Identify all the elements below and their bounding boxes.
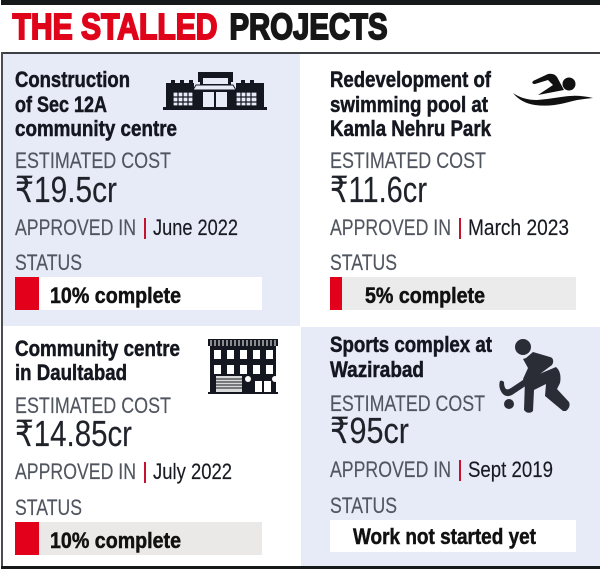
cost value: ₹11.6cr	[330, 169, 427, 210]
heading: Sports complex at	[330, 332, 493, 357]
cost value: ₹95cr	[330, 410, 409, 451]
heading: of Sec 12A	[15, 92, 107, 117]
heading: Community centre	[15, 336, 180, 361]
estimated cost: ESTIMATED COST	[15, 393, 171, 418]
icon: apartment building	[208, 339, 278, 394]
status bar: 5% complete	[365, 283, 485, 308]
heading: in Daultabad	[15, 360, 127, 385]
approval date: APPROVED IN	[15, 215, 136, 240]
approval date: Sept 2019	[468, 457, 553, 482]
status bar: 10% complete	[50, 528, 181, 553]
approval date: APPROVED IN	[15, 459, 136, 484]
approval date	[330, 215, 569, 240]
approval date: June 2022	[153, 215, 238, 240]
left border	[1, 52, 3, 568]
approval date: APPROVED IN	[330, 215, 451, 240]
title: THE STALLED	[12, 6, 218, 47]
approval date: APPROVED IN	[330, 457, 451, 482]
icon: community centre building	[163, 72, 267, 110]
heading: Kamla Nehru Park	[330, 116, 492, 141]
heading	[15, 336, 180, 385]
panel: Daultabad community centre	[2, 327, 300, 566]
status bar	[15, 277, 262, 310]
top rule	[1, 0, 600, 5]
icon: swimmer	[513, 74, 593, 106]
status label: STATUS	[15, 495, 82, 520]
approval date: March 2023	[468, 215, 569, 240]
status label: STATUS	[330, 493, 397, 518]
status bar: 10% complete	[50, 283, 181, 308]
status label: STATUS	[15, 250, 82, 275]
heading: Redevelopment of	[330, 67, 492, 92]
heading	[330, 332, 493, 382]
estimated cost: ESTIMATED COST	[330, 391, 485, 416]
heading	[330, 67, 492, 141]
title: PROJECTS	[230, 6, 388, 47]
approval date	[15, 459, 232, 484]
status bar	[330, 277, 576, 310]
heading: swimming pool at	[330, 92, 489, 117]
panel: Kamla Nehru Park swimming pool	[300, 54, 600, 326]
icon: hockey player	[499, 339, 570, 413]
approval date	[330, 457, 553, 482]
heading: community centre	[15, 116, 177, 141]
heading: Construction	[15, 67, 130, 92]
heading	[15, 67, 177, 141]
bottom rule	[1, 566, 600, 569]
status bar	[330, 520, 576, 552]
cost value: ₹14.85cr	[15, 413, 132, 454]
status label: STATUS	[330, 250, 397, 275]
title	[12, 6, 388, 47]
estimated cost: ESTIMATED COST	[330, 148, 486, 173]
cost value: ₹19.5cr	[15, 169, 117, 210]
heading: Wazirabad	[330, 357, 424, 382]
approval date: July 2022	[153, 459, 232, 484]
title underline	[1, 52, 600, 54]
estimated cost: ESTIMATED COST	[15, 148, 171, 173]
approval date	[15, 215, 238, 240]
panel: Wazirabad sports complex	[301, 327, 600, 566]
status bar: Work not started yet	[353, 524, 537, 549]
panel: Sec 12A community centre	[2, 54, 300, 326]
status bar	[15, 522, 262, 555]
